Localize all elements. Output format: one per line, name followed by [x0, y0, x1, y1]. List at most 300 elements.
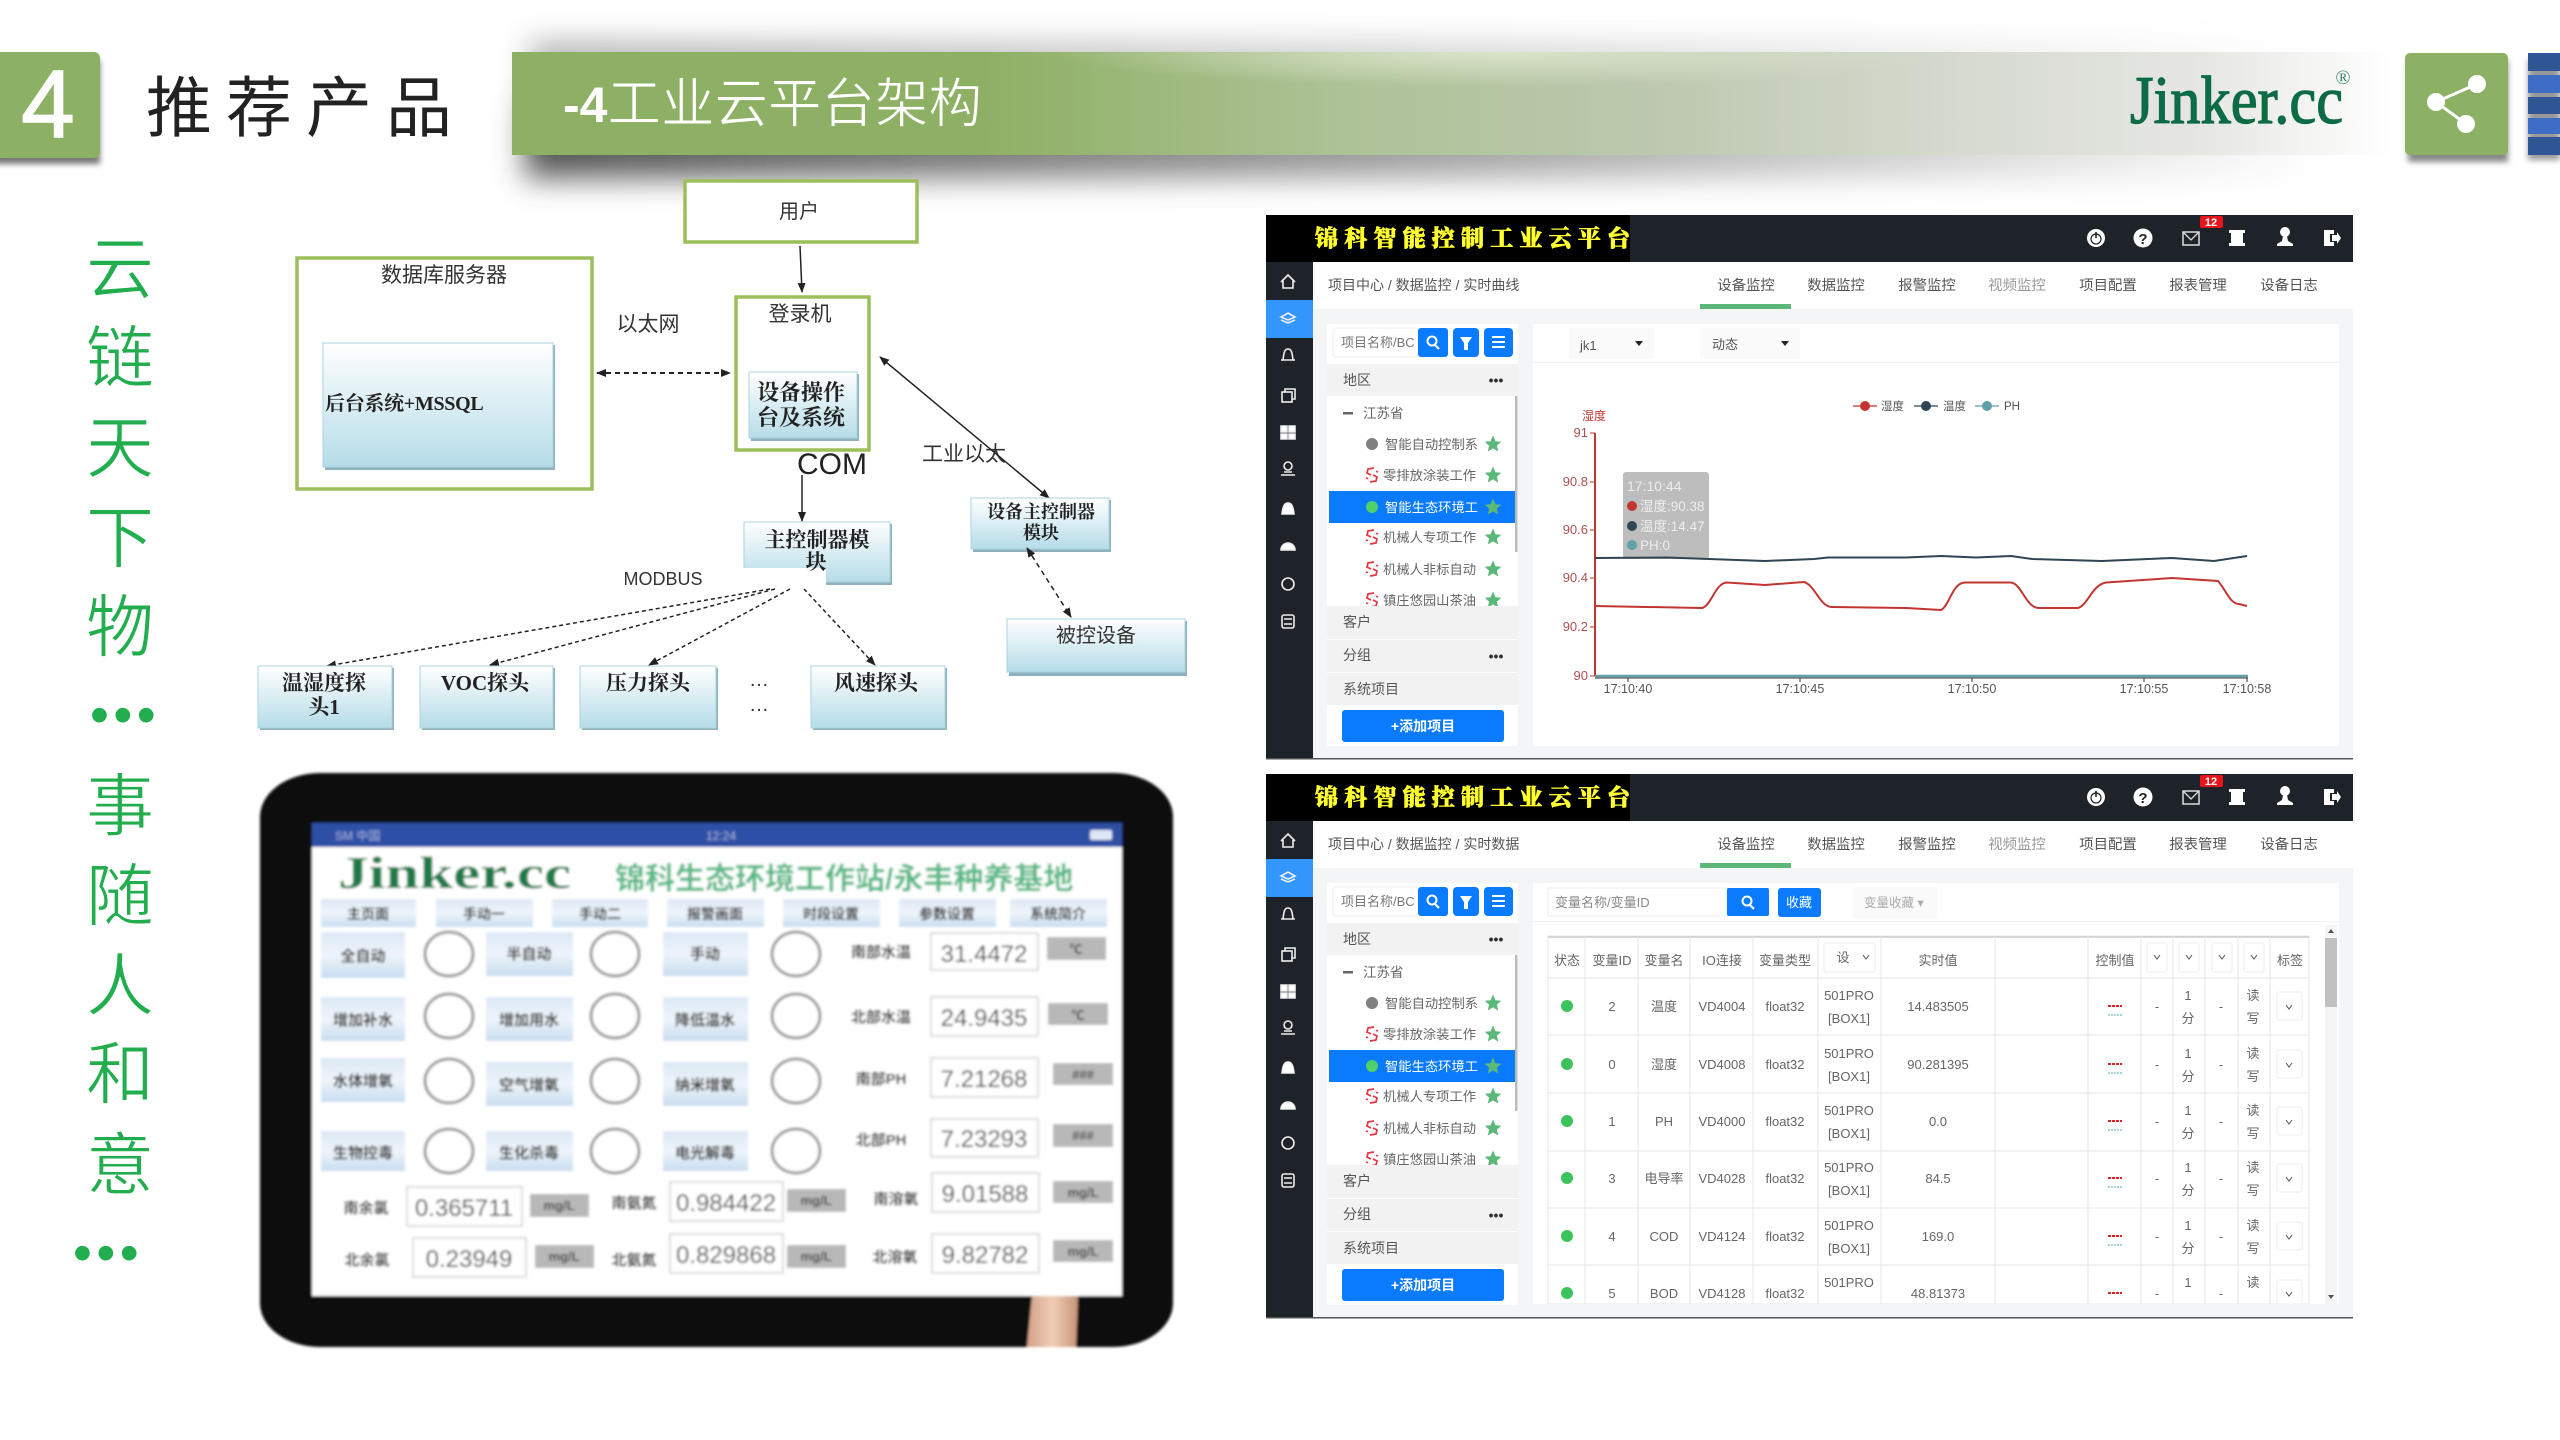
vertical slogan: 天 — [86, 411, 154, 487]
section number badge — [0, 51, 100, 164]
readouts: 0.984422 — [676, 1190, 776, 1217]
control buttons: 电光解毒 — [675, 1144, 735, 1162]
readouts: 9.82782 — [942, 1242, 1028, 1269]
nav tabs: 设备日志 — [2260, 836, 2318, 853]
legend — [1853, 399, 2020, 413]
box: 风速探头: 风速探头 — [834, 671, 920, 695]
x axis: 17:10:45 — [1776, 682, 1824, 696]
row 4 — [1561, 1160, 2302, 1198]
y axis: 90.6 — [1563, 522, 1588, 537]
row 1: - — [2155, 999, 2159, 1014]
box: 登录机: 登录机 — [768, 303, 832, 326]
box: VOC探头 — [420, 666, 555, 730]
row 4: - — [2155, 1171, 2159, 1186]
row 3: 读 — [2246, 1103, 2260, 1118]
row 2: - — [2155, 1057, 2159, 1072]
x axis: 17:10:55 — [2120, 682, 2168, 696]
readouts: mg/L — [1067, 1185, 1099, 1200]
chart card — [1533, 324, 2339, 746]
app frame — [1266, 774, 2353, 1318]
readouts: 南氨氮 — [611, 1194, 657, 1212]
tab buttons: 报警画面 — [687, 906, 743, 922]
header row: 变量类型 — [1759, 953, 1811, 968]
readouts: 31.4472 — [941, 941, 1027, 968]
left project tree card: 智能自动控制系 — [1385, 437, 1478, 452]
left project tree card: 地区 — [1343, 931, 1371, 947]
row 2: 90.281395 — [1907, 1057, 1969, 1072]
box: VOC探头: VOC探头 — [441, 671, 531, 695]
header row: 实时值 — [1918, 953, 1958, 968]
vertical slogan: 意 — [86, 1128, 154, 1204]
control buttons: 增加补水 — [333, 1011, 393, 1029]
row 3: 0.0 — [1929, 1114, 1947, 1129]
box: 设备主控制器模块: 模块 — [1023, 523, 1059, 543]
left project tree card: ••• — [1489, 931, 1503, 947]
left project tree card: 机械人专项工作 — [1383, 530, 1476, 545]
row 1: 分 — [2181, 1011, 2195, 1026]
row 5: float32 — [1765, 1229, 1805, 1244]
chart card: 动态 — [1712, 337, 1738, 352]
row 5: VD4124 — [1699, 1229, 1745, 1244]
chart card: jk1 — [1579, 338, 1597, 353]
row 5: 501PRO — [1824, 1218, 1874, 1233]
row 6: - — [2219, 1286, 2223, 1301]
vertical slogan: 云 — [86, 232, 154, 308]
control buttons: 生化杀毒 — [499, 1144, 559, 1162]
left project tree card: 智能自动控制系 — [1385, 996, 1478, 1011]
nav tabs: 项目配置 — [2079, 277, 2137, 294]
left project tree card: ••• — [1489, 372, 1503, 388]
left project tree card — [1327, 883, 1518, 1305]
dashboard: realtime data table — [1266, 774, 2353, 1318]
control buttons — [321, 932, 748, 1171]
box: 数据库服务器: 后台系统+MSSQL — [325, 392, 483, 415]
vertical slogan: 物 — [86, 590, 154, 666]
readouts: ### — [1072, 1067, 1095, 1082]
readouts: mg/L — [800, 1249, 832, 1264]
row 6: 1 — [2184, 1275, 2192, 1290]
tab buttons: 手动二 — [579, 906, 621, 922]
row 1: float32 — [1765, 999, 1805, 1014]
left project tree card: 零排放涂装工作 — [1383, 1027, 1476, 1042]
box: 数据库服务器 — [297, 258, 592, 489]
x axis: 17:10:50 — [1948, 682, 1996, 696]
row 5: 1 — [2184, 1218, 2192, 1233]
left project tree card: 镇庄悠园山茶油 — [1383, 593, 1476, 608]
row 3: 写 — [2246, 1126, 2260, 1141]
row 3: [BOX1] — [1828, 1126, 1870, 1141]
architecture diagram — [258, 181, 1187, 730]
tooltip: 温度:14.47 — [1640, 519, 1705, 534]
box: 登录机: 设备操作 — [757, 380, 845, 405]
label: ellipsis — [749, 669, 769, 716]
left project tree card: 项目名称/BC — [1341, 894, 1415, 909]
nav tabs: 数据监控 — [1807, 277, 1865, 294]
screen — [312, 823, 1122, 1296]
row 4: 84.5 — [1925, 1171, 1951, 1186]
left project tree card: 系统项目 — [1343, 681, 1399, 697]
readouts: 北部PH — [856, 1131, 906, 1149]
row 3: float32 — [1765, 1114, 1805, 1129]
row 6 — [1561, 1275, 2302, 1304]
row 1: 写 — [2246, 1011, 2260, 1026]
left project tree card: 客户 — [1343, 614, 1371, 630]
row 2 — [1561, 1046, 2302, 1084]
nav tabs: 报警监控 — [1898, 277, 1956, 294]
vertical slogan: 链 — [86, 321, 154, 397]
tab buttons: 参数设置 — [919, 906, 975, 922]
nav tabs: 设备日志 — [2260, 277, 2318, 294]
left project tree card: 零排放涂装工作 — [1383, 468, 1476, 483]
nav tabs: 视频监控 — [1988, 836, 2046, 853]
data card toolbar: 变量名称/变量ID — [1555, 895, 1650, 910]
title banner — [512, 52, 2392, 155]
y axis: 90 — [1574, 668, 1588, 683]
row 5: 4 — [1608, 1229, 1616, 1244]
vertical slogan: 随 — [86, 859, 154, 935]
header row — [1554, 943, 2303, 972]
row 5: 读 — [2246, 1218, 2260, 1233]
grid — [1548, 936, 2309, 1304]
left project tree card: 江苏省 — [1363, 406, 1404, 421]
readouts: 0.365711 — [415, 1195, 513, 1222]
left project tree card: 系统项目 — [1343, 1240, 1399, 1256]
row 4: 电导率 — [1644, 1171, 1684, 1186]
platform title: 锦科智能控制工业云平台 — [1315, 225, 1636, 252]
row 4: 写 — [2246, 1183, 2260, 1198]
readouts: 北部水温 — [851, 1008, 911, 1026]
breadcrumb: 项目中心 / 数据监控 / 实时数据 — [1328, 836, 1519, 852]
row 3: - — [2219, 1114, 2223, 1129]
box: 温湿度探头1 — [258, 666, 394, 730]
data card toolbar: 收藏 — [1786, 895, 1812, 910]
row 2: - — [2219, 1057, 2223, 1072]
left project tree card: 智能生态环境工 — [1385, 500, 1478, 515]
row 5: COD — [1650, 1229, 1678, 1244]
arrow: 工业以太 link — [880, 357, 1049, 498]
vertical slogan: ••• — [90, 685, 160, 745]
row 3: 分 — [2181, 1126, 2195, 1141]
line chart — [1563, 399, 2271, 696]
row 6: BOD — [1650, 1286, 1678, 1301]
box: 用户: 用户 — [779, 200, 819, 223]
tab buttons: 手动一 — [463, 906, 505, 922]
label: ellipsis: … — [749, 669, 769, 691]
box: 压力探头: 压力探头 — [606, 671, 692, 695]
box: 压力探头 — [580, 666, 718, 730]
icon: share button — [2405, 53, 2508, 162]
label: 工业以太: 工业以太 — [922, 443, 1006, 466]
row 4: 读 — [2246, 1160, 2260, 1175]
row 2: 湿度 — [1651, 1057, 1677, 1072]
nav tabs: 设备监控 — [1717, 836, 1775, 853]
vertical slogan: 人 — [86, 949, 154, 1025]
row 5: 169.0 — [1922, 1229, 1954, 1244]
header row: IO连接 — [1702, 953, 1742, 968]
status bar: SM 中国 — [335, 828, 380, 843]
label: ellipsis: … — [749, 694, 769, 716]
label: 以太网: 以太网 — [616, 313, 680, 336]
readouts: 北氨氮 — [611, 1251, 657, 1269]
left project tree card: 地区 — [1343, 372, 1371, 388]
arrows: MODBUS links — [327, 589, 875, 666]
left project tree card: 客户 — [1343, 1173, 1371, 1189]
heading: 推荐产品: 推荐产品 — [146, 71, 466, 145]
row 4: 1 — [2184, 1160, 2192, 1175]
row 2: float32 — [1765, 1057, 1805, 1072]
box: 主控制器模块: 块 — [806, 550, 826, 574]
left project tree card: 机械人非标自动 — [1383, 562, 1476, 577]
top toolbar icons: ? — [2138, 790, 2148, 807]
legend: 温度 — [1943, 399, 1966, 413]
readouts: mg/L — [548, 1249, 580, 1264]
readouts: 7.21268 — [941, 1066, 1027, 1093]
arrow: COM to 主控制器模块 — [801, 475, 803, 521]
logo: Jinker.cc: Jinker.cc — [2130, 62, 2343, 138]
nav tabs: 报表管理 — [2169, 836, 2227, 853]
header row: 状态 — [1554, 953, 1580, 968]
box: 设备主控制器模块: 设备主控制器 — [987, 502, 1095, 522]
row 1: - — [2219, 999, 2223, 1014]
y axis: 90.4 — [1563, 570, 1588, 585]
indicator lamps — [425, 932, 820, 1173]
row 5 — [1561, 1218, 2302, 1256]
box: 温湿度探头1: 温湿度探 — [282, 671, 366, 695]
left project tree card: 江苏省 — [1363, 965, 1404, 980]
nav tabs: 设备监控 — [1717, 277, 1775, 294]
nav tabs — [1700, 277, 2318, 309]
header row: 变量名 — [1644, 953, 1684, 968]
tooltip — [1623, 472, 1709, 559]
breadcrumb: 项目中心 / 数据监控 / 实时曲线 — [1328, 277, 1519, 293]
readouts: 7.23293 — [941, 1126, 1027, 1153]
top toolbar icons — [2087, 775, 2341, 807]
finger — [1027, 1296, 1078, 1347]
row 4: float32 — [1765, 1171, 1805, 1186]
row 5: - — [2219, 1229, 2223, 1244]
row 4: 501PRO — [1824, 1160, 1874, 1175]
header shadow above — [530, 42, 2330, 102]
left project tree card: 分组 — [1343, 1206, 1371, 1222]
legend: 湿度 — [1881, 399, 1904, 413]
row 1 — [1561, 988, 2302, 1026]
top toolbar icons: ? — [2138, 231, 2148, 248]
row 6: VD4128 — [1699, 1286, 1745, 1301]
row 2: [BOX1] — [1828, 1069, 1870, 1084]
box: 被控设备 — [1007, 619, 1187, 676]
left project tree card: +添加项目 — [1391, 1277, 1455, 1293]
row 5: 写 — [2246, 1241, 2260, 1256]
readouts — [343, 933, 1113, 1277]
row 4: 3 — [1608, 1171, 1616, 1186]
tab buttons: 主页面 — [347, 906, 389, 922]
arrow: 主控 to 被控设备 — [1027, 548, 1071, 617]
readouts: ℃ — [1069, 942, 1083, 957]
readouts: 北余氯 — [344, 1251, 390, 1269]
row 3: PH — [1655, 1114, 1673, 1129]
row 3: - — [2155, 1114, 2159, 1129]
control buttons: 手动 — [690, 946, 720, 963]
status bar — [312, 823, 1122, 847]
dashboard: realtime curve — [1266, 215, 2353, 760]
brand: Jinker.cc — [338, 847, 571, 898]
control buttons: 水体增氧 — [333, 1072, 393, 1090]
box: 被控设备: 被控设备 — [1056, 624, 1136, 647]
row 6: 5 — [1608, 1286, 1616, 1301]
row 3 — [1561, 1103, 2302, 1141]
row 2: VD4008 — [1699, 1057, 1745, 1072]
nav tabs: 报表管理 — [2169, 277, 2227, 294]
tooltip: 湿度:90.38 — [1640, 499, 1705, 514]
box: 用户 — [685, 181, 917, 242]
row 4: - — [2219, 1171, 2223, 1186]
icon: blue menu stack — [2528, 53, 2560, 160]
row 2: 0 — [1608, 1057, 1616, 1072]
readouts: mg/L — [800, 1193, 832, 1208]
box: 主控制器模块 — [743, 522, 892, 586]
box: 数据库服务器: 数据库服务器 — [381, 264, 507, 287]
arrow: 用户 to 登录机 — [800, 246, 802, 292]
header row: 标签 — [2277, 953, 2303, 968]
row 2: 读 — [2246, 1046, 2260, 1061]
title banner: -4工业云平台架构 — [563, 75, 982, 134]
label: COM: COM — [797, 448, 867, 481]
readouts: 9.01588 — [942, 1181, 1028, 1208]
left project tree card: 项目名称/BC — [1341, 335, 1415, 350]
left project tree card: 分组 — [1343, 647, 1371, 663]
row 4: VD4028 — [1699, 1171, 1745, 1186]
vertical slogan: ••• — [73, 1223, 143, 1283]
readouts: 南部水温 — [851, 943, 911, 961]
readouts: 北溶氧 — [872, 1248, 918, 1266]
left project tree card — [1327, 324, 1518, 746]
vertical slogan: 下 — [86, 501, 154, 577]
row 6: 读 — [2246, 1275, 2260, 1290]
data table — [1548, 936, 2309, 1304]
box: 登录机: 台及系统 — [757, 405, 846, 430]
table scrollbar — [2325, 925, 2337, 1304]
row 6: - — [2155, 1286, 2159, 1301]
series: temperature — [1595, 556, 2247, 561]
x axis — [1595, 676, 2271, 696]
y axis: 90.2 — [1563, 619, 1588, 634]
tab buttons: 系统简介 — [1030, 906, 1086, 922]
station title: 锦科生态环境工作站/永丰种养基地 — [615, 863, 1073, 896]
nav tabs: 数据监控 — [1807, 836, 1865, 853]
readouts: mg/L — [1067, 1244, 1099, 1259]
label: MODBUS: MODBUS — [623, 569, 703, 589]
sidebar icons — [1281, 275, 1295, 628]
header shadow below — [525, 100, 2325, 178]
row 1: VD4004 — [1699, 999, 1745, 1014]
tablet HMI photo — [260, 773, 1173, 1347]
left project tree card: 机械人专项工作 — [1383, 1089, 1476, 1104]
readouts: 南余氯 — [343, 1199, 389, 1217]
left project tree card: 智能生态环境工 — [1385, 1059, 1478, 1074]
y axis: 90.8 — [1563, 474, 1588, 489]
readouts: 0.829868 — [676, 1242, 776, 1269]
readouts: ### — [1072, 1128, 1095, 1143]
row 3: 501PRO — [1824, 1103, 1874, 1118]
row 4: [BOX1] — [1828, 1183, 1870, 1198]
vertical slogan — [73, 232, 160, 1283]
row 2: 分 — [2181, 1069, 2195, 1084]
box: 登录机 — [736, 297, 869, 450]
readouts: 南溶氧 — [873, 1190, 919, 1208]
header row: 变量ID — [1592, 953, 1632, 968]
vertical slogan: 事 — [86, 769, 154, 845]
row 5: - — [2155, 1229, 2159, 1244]
vertical slogan: 和 — [86, 1037, 154, 1113]
row 1: 2 — [1608, 999, 1616, 1014]
row 1: 1 — [2184, 988, 2192, 1003]
tooltip: PH:0 — [1640, 538, 1670, 553]
left project tree card: +添加项目 — [1391, 718, 1455, 734]
row 6: 501PRO — [1824, 1275, 1874, 1290]
row 5: [BOX1] — [1828, 1241, 1870, 1256]
row 1: 温度 — [1651, 999, 1677, 1014]
section number badge: 4 — [21, 51, 75, 158]
readouts: mg/L — [543, 1198, 575, 1213]
y axis: 91 — [1574, 425, 1588, 440]
row 3: 1 — [2184, 1103, 2192, 1118]
readouts: 24.9435 — [941, 1005, 1027, 1032]
nav tabs: 项目配置 — [2079, 836, 2137, 853]
control buttons: 半自动 — [506, 945, 552, 963]
control buttons: 降低温水 — [675, 1011, 735, 1029]
arrow: 以太网 link — [597, 372, 730, 374]
row 1: [BOX1] — [1828, 1011, 1870, 1026]
row 3: 1 — [1608, 1114, 1616, 1129]
status bar: 12:24 — [706, 829, 736, 843]
data card toolbar: 变量收藏 ▾ — [1864, 895, 1924, 910]
readouts: 0.23949 — [426, 1246, 512, 1273]
app frame — [1266, 215, 2353, 760]
header row: 控制值 — [2095, 953, 2135, 968]
legend: PH — [2004, 401, 2020, 413]
logo: Jinker.cc: ® — [2335, 67, 2351, 89]
box: 设备主控制器模块 — [971, 498, 1111, 552]
row 2: 写 — [2246, 1069, 2260, 1084]
row 4: 分 — [2181, 1183, 2195, 1198]
sidebar icons — [1281, 834, 1295, 1187]
header row: 设 — [1836, 950, 1850, 965]
control buttons: 增加用水 — [499, 1011, 559, 1029]
readouts: ℃ — [1071, 1008, 1085, 1023]
y axis: 湿度 — [1582, 408, 1606, 423]
row 6: float32 — [1765, 1286, 1805, 1301]
x axis: 17:10:40 — [1604, 682, 1652, 696]
row 1: 14.483505 — [1907, 999, 1969, 1014]
row 1: 501PRO — [1824, 988, 1874, 1003]
top toolbar icons — [2087, 216, 2341, 248]
platform title: 锦科智能控制工业云平台 — [1315, 784, 1636, 811]
nav tabs: 视频监控 — [1988, 277, 2046, 294]
tooltip: 17:10:44 — [1627, 478, 1682, 494]
box: 主控制器模块: 主控制器模 — [764, 528, 870, 552]
readouts: 南部PH — [856, 1070, 906, 1088]
row 1: 读 — [2246, 988, 2260, 1003]
y axis — [1563, 408, 1606, 683]
box: 风速探头 — [811, 666, 947, 730]
nav tabs: 报警监控 — [1898, 836, 1956, 853]
row 5: 分 — [2181, 1241, 2195, 1256]
row 2: 501PRO — [1824, 1046, 1874, 1061]
control buttons: 生物控毒 — [333, 1144, 393, 1162]
tab buttons — [321, 899, 1107, 927]
box: 温湿度探头1: 头1 — [308, 695, 340, 719]
series: humidity — [1595, 578, 2247, 610]
